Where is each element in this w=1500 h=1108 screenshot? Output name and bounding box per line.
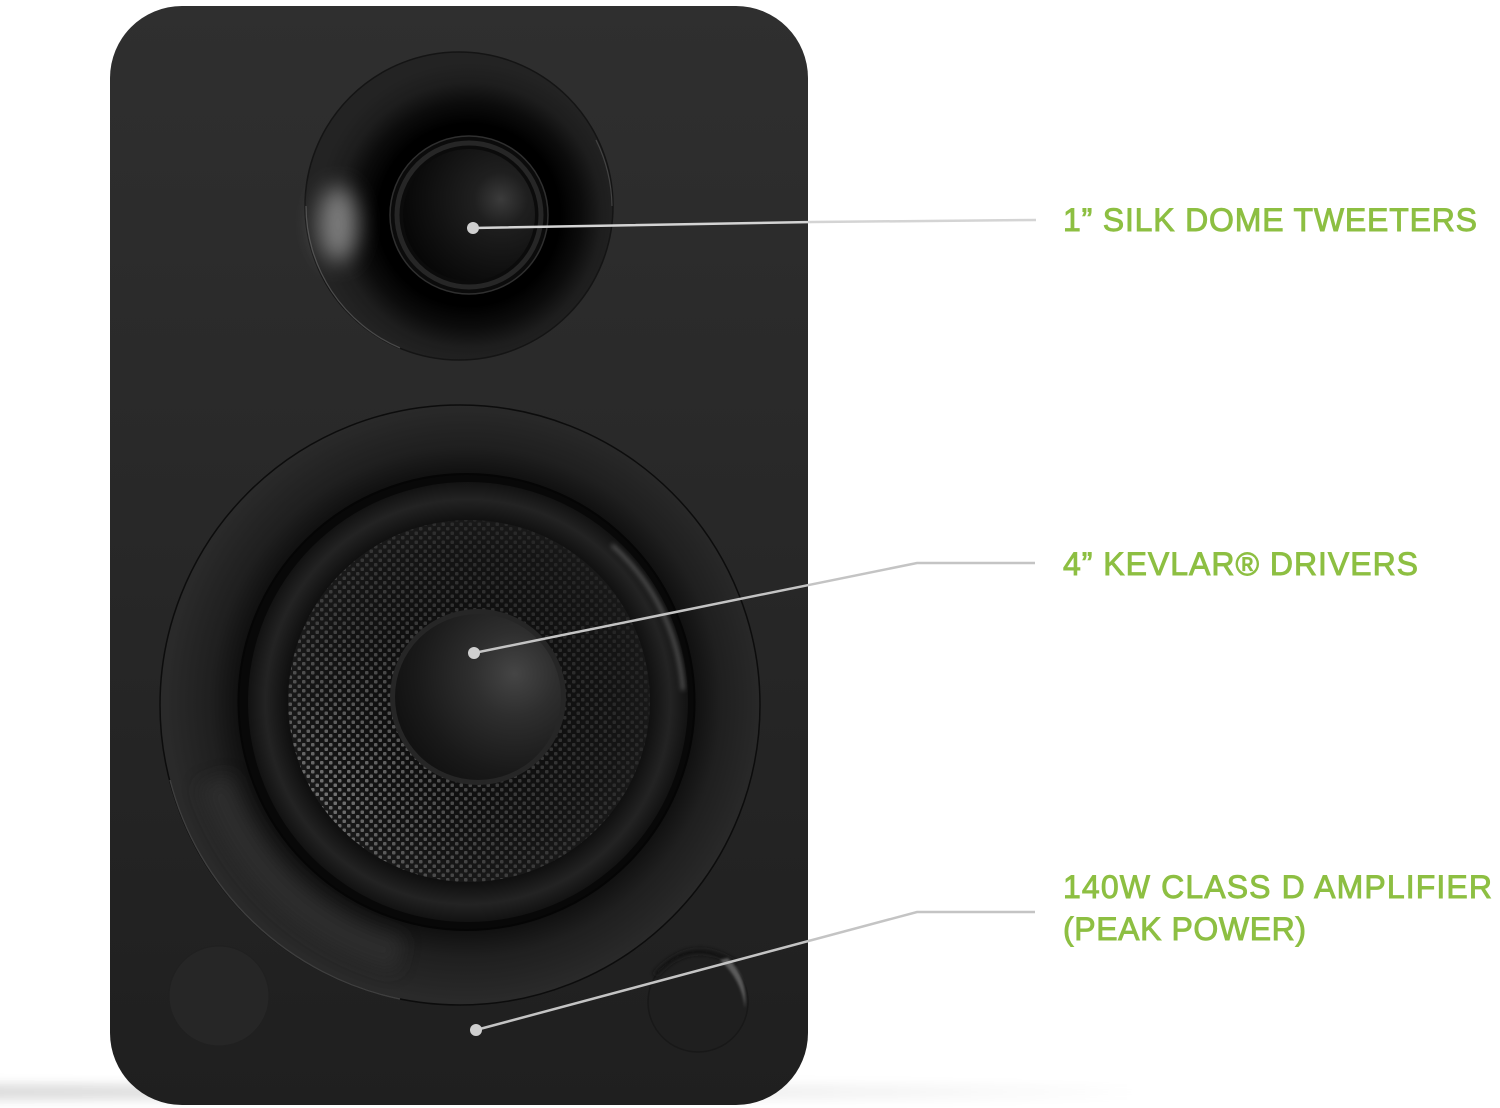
woofer surround bbox=[248, 482, 688, 922]
callout: amplifier bbox=[470, 869, 1492, 1036]
leader line: tweeters bbox=[473, 220, 1036, 228]
leader line: amplifier bbox=[476, 912, 1035, 1030]
woofer dome bbox=[390, 609, 566, 785]
label: amplifier: 140W CLASS D AMPLIFIER bbox=[1063, 869, 1492, 905]
left foot bbox=[169, 946, 269, 1046]
speaker cabinet bbox=[110, 6, 808, 1105]
label: drivers: 4” KEVLAR® DRIVERS bbox=[1063, 546, 1418, 582]
woofer rim bbox=[238, 474, 694, 930]
leader line: drivers bbox=[474, 563, 1035, 653]
callout: tweeters bbox=[467, 202, 1477, 238]
label: amplifier bbox=[1063, 869, 1492, 947]
floor shadow bbox=[0, 1084, 1150, 1100]
callout: drivers bbox=[468, 546, 1418, 659]
woofer cone weave bbox=[288, 520, 650, 882]
woofer mounting plate bbox=[160, 405, 760, 1005]
tweeter highlight bbox=[318, 186, 358, 262]
label: tweeters: 1” SILK DOME TWEETERS bbox=[1063, 202, 1477, 238]
tweeter dome bbox=[403, 149, 535, 281]
volume knob bbox=[648, 951, 748, 1052]
label: amplifier: (PEAK POWER) bbox=[1063, 911, 1306, 947]
woofer bbox=[160, 405, 760, 1005]
tweeter bbox=[305, 52, 613, 360]
